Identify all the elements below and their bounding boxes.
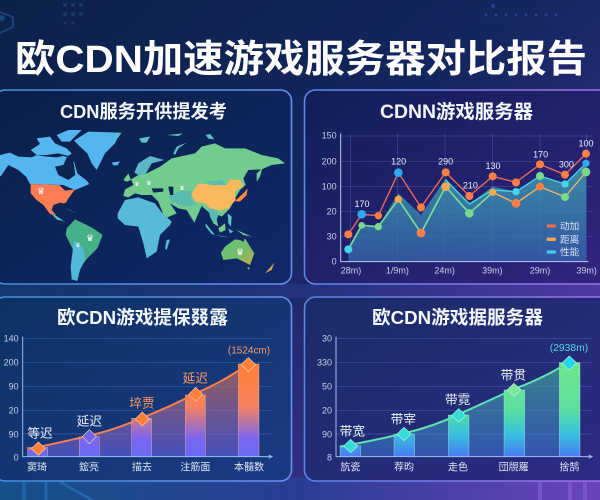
value labels: 等迟 [27,425,53,440]
axis labels: 0 [14,452,19,462]
value labels: 带宽 [340,424,365,439]
bars [340,363,580,457]
panel: orange growth chart [0,297,292,481]
diamond markers [31,358,256,455]
data labels: 170 [533,150,548,160]
axis labels: 1/9m) [386,265,409,275]
data labels [354,139,593,209]
map markers: ♛ [86,233,94,243]
axis labels [322,131,597,275]
value labels: 带宰 [391,411,416,426]
data labels: 210 [463,180,478,190]
legend: 距离 [560,234,580,246]
axis labels [4,333,19,462]
panel: world map [0,90,292,284]
heading: green chart panel: 欧CDN游戏据服务器 [372,307,543,328]
axis labels: 200 [4,358,19,368]
data labels: 170 [354,199,369,209]
orange bar and line chart: 描去 [132,460,152,473]
value labels: (2938m) [550,343,588,354]
axis labels: 20 [9,406,19,416]
area under lines [348,163,586,262]
axis labels: 100 [322,182,337,192]
map markers: ♛ [37,186,45,196]
value labels [340,343,588,439]
panel: green growth chart [304,297,600,481]
axis labels: 0 [332,257,337,267]
value labels: 延迟 [77,414,102,428]
axis labels: 50 [322,382,332,392]
map: Americas [0,130,120,281]
map markers: ♛ [236,247,244,257]
area under curve [340,362,569,457]
map markers: ♛ [75,242,81,249]
axis labels: 30 [322,334,332,344]
data labels: 300 [559,160,574,170]
value labels: 带贯 [501,368,526,382]
axis labels: 140 [4,333,19,343]
map markers: ♛ [179,185,185,192]
data points [344,150,590,253]
axis labels: 30 [327,232,337,242]
axis labels: 200 [322,157,337,167]
orange bar and line chart: 注筋面 [180,460,210,473]
value labels [27,345,270,440]
legend [547,222,580,259]
data labels: 290 [438,157,453,167]
axis labels: 28m) [341,265,361,275]
value labels: (1524cm) [228,345,270,356]
orange bar and line chart: 窦琦 [27,460,47,473]
axis labels: 150 [322,131,337,141]
axis labels: 20 [327,207,337,217]
value labels: 带霓 [445,393,471,407]
legend: 性能 [560,247,580,259]
axis labels: 20 [322,406,332,416]
orange bar and line chart: 本髓数 [234,460,264,473]
panel: line chart [304,90,600,284]
heading: orange chart panel: 欧CDN游戏提保叕露 [57,307,228,328]
trend line [340,362,569,447]
axis labels: 90 [322,429,332,439]
axis labels: 24m) [434,265,455,275]
title: 欧CDN加速游戏服务器对比报告 [15,39,587,81]
green bar and line chart: 荐昀 [394,460,414,473]
axis labels: 39m) [482,265,503,275]
green bar and line chart [317,334,592,473]
heading: map panel: CDN服务开供提发考 [60,101,227,122]
area under curve [28,364,248,457]
data labels: 130 [485,161,500,171]
axis labels [317,334,332,463]
world map [0,130,285,281]
legend: 动加 [560,222,579,233]
series: orange and green [348,154,586,249]
map markers: ♛ [146,180,152,187]
green bar and line chart: 斻瓷 [340,460,360,473]
line chart [322,131,597,275]
map markers: ♛ [134,181,140,188]
value labels: 延迟 [183,372,208,386]
axis labels: 90 [9,382,19,392]
bars [28,364,259,457]
data labels: 100 [578,139,593,149]
orange bar and line chart: 鋐亮 [79,460,99,473]
green bar and line chart: 団覑羅 [499,460,529,473]
axis labels: 29m) [530,265,550,275]
axis labels: 90 [9,429,19,439]
trend line [28,364,248,449]
map: Eurasia Africa Oceania [115,133,285,273]
heading: line chart panel: CDNN游戏服务器 [380,100,533,123]
green bar and line chart: 走色 [448,460,468,473]
axis labels: 330 [317,358,332,368]
orange bar and line chart [4,333,272,473]
diamond markers [344,356,577,453]
axis labels: 39m) [576,265,597,275]
value labels: 埣贾 [129,396,155,410]
green bar and line chart: 捨鹄 [559,460,579,473]
data labels: 120 [391,157,406,167]
map markers [37,180,244,257]
axis labels: 8 [327,453,332,463]
